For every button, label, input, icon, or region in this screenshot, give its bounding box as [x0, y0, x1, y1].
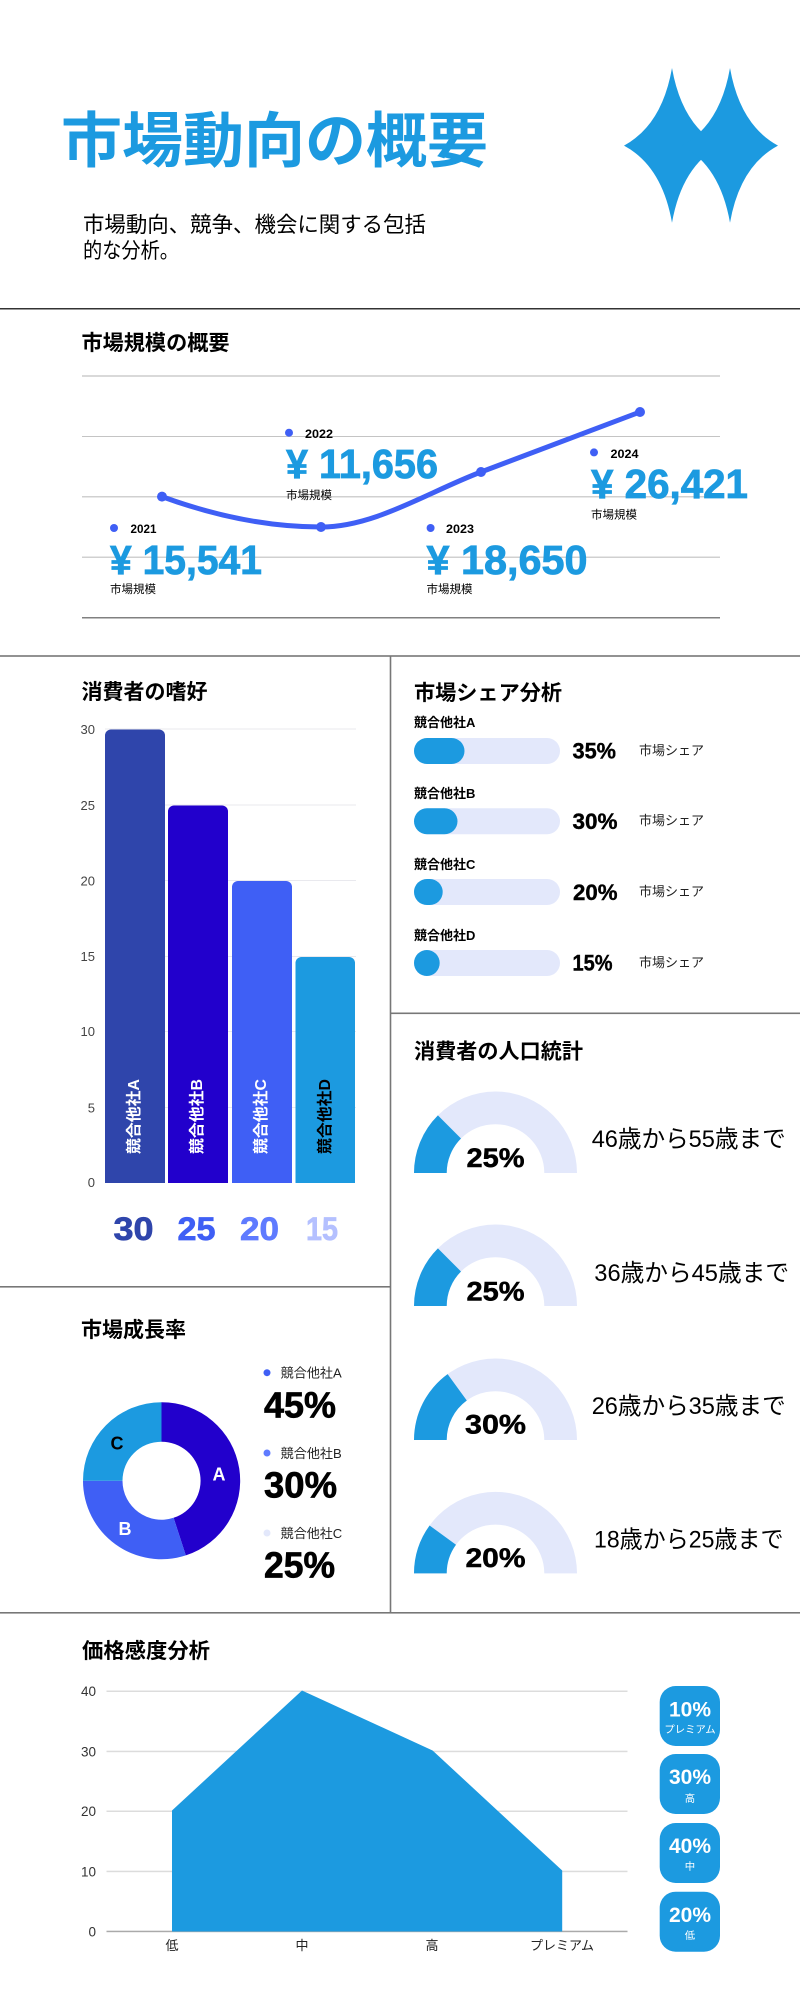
data label 2022: ¥ 11,656 — [286, 441, 438, 487]
data label 2023: 2023 — [446, 524, 474, 536]
legend B: 競合他社B — [281, 1446, 342, 1461]
data label 2021: 2021 — [130, 524, 157, 536]
title: 市場動向の概要 — [61, 108, 488, 175]
panel: market share analysis — [414, 682, 704, 976]
bar chart: 20 — [81, 874, 95, 888]
gauge 26-35: 30% — [465, 1410, 526, 1440]
badge premium: プレミアム — [664, 1724, 716, 1736]
data label 2022: 市場規模 — [286, 488, 332, 502]
badge high — [660, 1754, 720, 1814]
bar value numbers: 25 — [178, 1211, 216, 1247]
gauge 36-45 — [414, 1224, 789, 1306]
gauge 26-35: 26歳から35歳まで — [592, 1393, 786, 1420]
gauge 18-25 — [414, 1492, 784, 1573]
bar chart: 競合他社B — [188, 1079, 206, 1154]
panel: consumer preference — [81, 681, 356, 1247]
area chart: 20 — [81, 1804, 96, 1819]
bar chart — [81, 722, 356, 1190]
badge middle — [660, 1823, 720, 1883]
donut chart: A — [212, 1464, 226, 1484]
share row B: 市場シェア — [639, 813, 704, 828]
gauge 18-25: 18歳から25歳まで — [594, 1526, 784, 1554]
panel: market growth rate — [81, 1318, 342, 1586]
share row B: 競合他社B — [414, 786, 475, 801]
subtitle text — [83, 213, 426, 263]
legend B — [264, 1446, 342, 1506]
data label 2024: 2024 — [610, 449, 639, 461]
bar chart: 競合他社C — [252, 1079, 270, 1154]
data label 2022 — [285, 429, 438, 502]
legend C: 競合他社C — [281, 1526, 342, 1541]
legend A: 45% — [264, 1384, 336, 1426]
market size line — [157, 407, 645, 532]
area chart: 0 — [88, 1924, 96, 1940]
bar chart: 競合他社A — [125, 1079, 143, 1154]
share row A: 35% — [572, 738, 616, 764]
data label 2024 — [590, 448, 748, 522]
gauge 26-35 — [414, 1358, 786, 1440]
legend A: 競合他社A — [281, 1366, 342, 1381]
badge middle: 40% — [669, 1835, 711, 1858]
gauge 36-45: 25% — [466, 1276, 524, 1306]
heading: market share: 市場シェア分析 — [414, 682, 562, 705]
badge high: 30% — [669, 1766, 711, 1789]
bar chart: 25 — [81, 798, 95, 813]
area chart: 40 — [81, 1684, 96, 1699]
badge low: 低 — [685, 1930, 696, 1942]
share row C: 市場シェア — [639, 884, 704, 899]
data label 2023: 市場規模 — [426, 582, 473, 596]
bar value numbers: 15 — [306, 1211, 338, 1247]
badge low — [660, 1892, 720, 1952]
share row D — [414, 928, 704, 976]
area chart: 中 — [295, 1938, 309, 1953]
data label 2021: ¥ 15,541 — [110, 537, 262, 583]
heading: growth rate: 市場成長率 — [81, 1318, 186, 1342]
subtitle text: 市場動向、競争、機会に関する包括 — [83, 213, 426, 237]
area chart — [81, 1684, 628, 1953]
badge high: 高 — [685, 1792, 695, 1805]
bar chart: 30 — [81, 722, 95, 737]
legend C: 25% — [264, 1544, 335, 1586]
share row A: 市場シェア — [639, 743, 704, 758]
donut chart: C — [110, 1434, 124, 1454]
data label 2023 — [426, 524, 588, 596]
area chart: プレミアム — [530, 1938, 594, 1953]
legend B: 30% — [264, 1464, 337, 1506]
bar chart: 5 — [88, 1100, 95, 1116]
bar value numbers — [114, 1211, 338, 1247]
area chart: 10 — [81, 1864, 96, 1880]
line chart gridlines — [82, 375, 720, 618]
panel: market size overview — [82, 332, 748, 618]
badge premium — [660, 1686, 720, 1746]
panel: consumer demographics — [414, 1040, 789, 1573]
gauge 46-55: 46歳から55歳まで — [592, 1126, 786, 1153]
area chart: 30 — [81, 1744, 96, 1760]
heading: consumer preference: 消費者の嗜好 — [82, 681, 208, 704]
subtitle text: 的な分析。 — [83, 239, 179, 263]
gauge 18-25: 20% — [466, 1543, 526, 1573]
share row D: 競合他社D — [414, 928, 475, 943]
icon: double sparkle star — [624, 68, 778, 223]
bar chart: 0 — [88, 1175, 95, 1190]
section dividers — [0, 308, 800, 1614]
data label 2024: 市場規模 — [591, 508, 637, 522]
legend C — [264, 1526, 342, 1586]
bar value numbers: 30 — [114, 1211, 154, 1247]
badge low: 20% — [669, 1904, 711, 1927]
share row C — [414, 857, 704, 905]
share row D: 市場シェア — [639, 955, 704, 970]
data label 2021 — [110, 524, 262, 596]
share row B — [414, 786, 704, 834]
badge premium: 10% — [669, 1698, 711, 1722]
data label 2023: ¥ 18,650 — [426, 537, 588, 583]
data label 2021: 市場規模 — [110, 582, 156, 596]
gauge 46-55: 25% — [466, 1143, 524, 1173]
heading: price sensitivity: 価格感度分析 — [82, 1639, 210, 1663]
share row C: 20% — [573, 880, 618, 905]
heading: market size: 市場規模の概要 — [82, 332, 230, 355]
share row D: 15% — [572, 950, 612, 976]
badge middle: 中 — [685, 1860, 695, 1873]
area chart: 高 — [425, 1938, 439, 1953]
donut chart: B — [118, 1519, 132, 1539]
donut chart — [83, 1402, 240, 1559]
share row C: 競合他社C — [414, 857, 476, 872]
gauge 36-45: 36歳から45歳まで — [594, 1260, 789, 1287]
share row A: 競合他社A — [414, 715, 476, 730]
bar chart: 競合他社D — [316, 1079, 334, 1154]
bar chart: 15 — [81, 949, 95, 964]
share row B: 30% — [572, 809, 618, 834]
data label 2022: 2022 — [305, 429, 333, 441]
bar value numbers: 20 — [240, 1211, 279, 1247]
gauge 46-55 — [414, 1091, 786, 1173]
panel: price sensitivity analysis — [81, 1639, 720, 1953]
area chart: 低 — [165, 1938, 179, 1953]
data label 2024: ¥ 26,421 — [591, 461, 748, 507]
heading: demographics: 消費者の人口統計 — [414, 1040, 583, 1064]
bar chart: 10 — [81, 1024, 95, 1039]
share row A — [414, 715, 704, 764]
legend A — [264, 1366, 342, 1426]
